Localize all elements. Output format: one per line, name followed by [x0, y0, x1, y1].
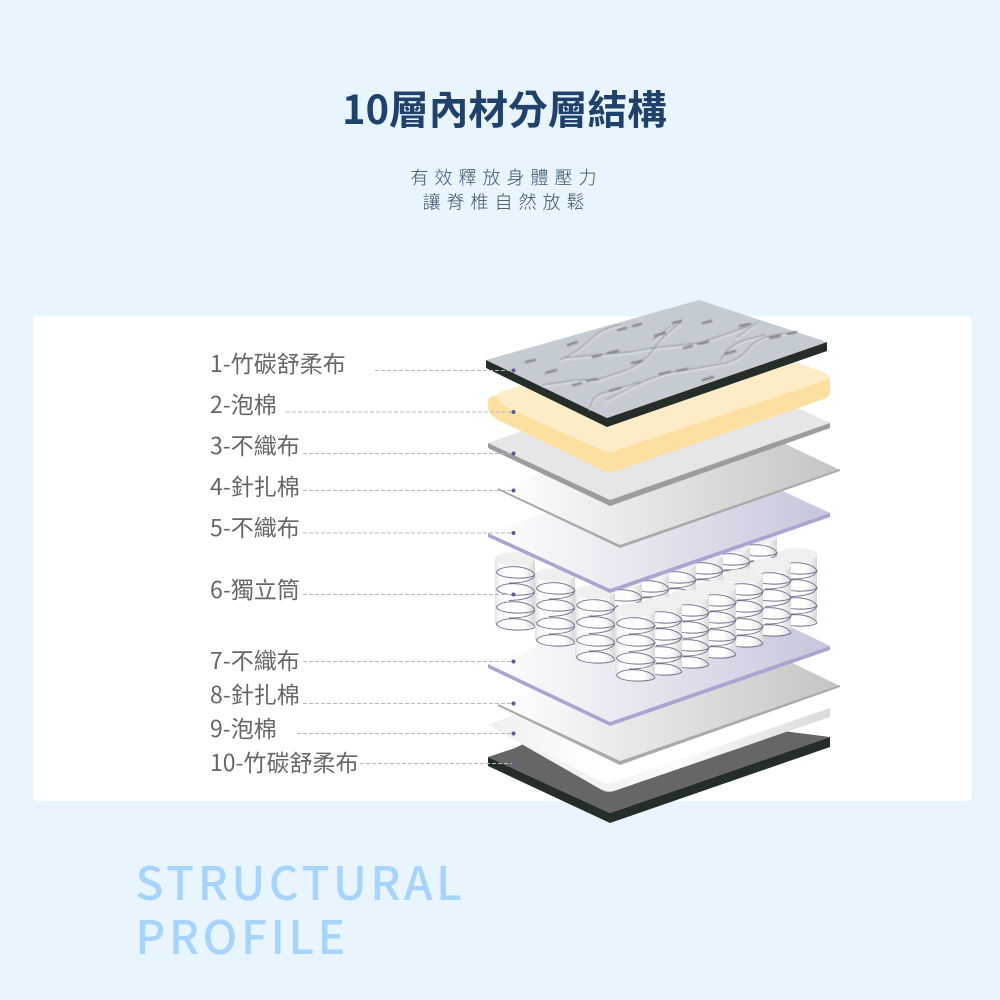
- label 1: [210, 345, 516, 379]
- label 7: [210, 642, 516, 676]
- label 7: 7-不織布: [210, 642, 300, 676]
- layer 4: needle-punched cotton: [498, 412, 840, 548]
- label 10: 10-竹碳舒柔布: [210, 744, 359, 778]
- label 5: 5-不織布: [210, 509, 300, 543]
- label 9: [210, 710, 516, 744]
- label 3: 3-不織布: [210, 427, 300, 461]
- label 3: [210, 427, 516, 461]
- label 8: 8-針扎棉: [210, 676, 300, 710]
- label 4: [210, 468, 516, 502]
- layer 1: bamboo charcoal quilted fabric: [486, 300, 827, 427]
- label 10: [210, 744, 516, 778]
- label 2: [210, 386, 516, 420]
- panel: white card: [33, 316, 972, 801]
- label 6: [210, 571, 516, 605]
- layer 10: bamboo charcoal fabric: [488, 708, 830, 823]
- label 9: 9-泡棉: [210, 710, 277, 744]
- label 1: 1-竹碳舒柔布: [210, 345, 346, 379]
- layer 6: pocket springs: [495, 530, 817, 681]
- english caption: PROFILE: [136, 902, 349, 968]
- title: 10層內材分層結構: [342, 79, 667, 136]
- layer 5: non-woven fabric: [488, 456, 830, 593]
- layer 3: non-woven fabric: [488, 366, 830, 506]
- layer labels and leader lines: [210, 345, 516, 778]
- layer 2: foam: [488, 330, 830, 472]
- label 6: 6-獨立筒: [210, 571, 300, 605]
- label 4: 4-針扎棉: [210, 468, 300, 502]
- english caption: [136, 848, 465, 968]
- layer 9: foam: [488, 680, 830, 792]
- english caption: STRUCTURAL: [136, 848, 465, 914]
- label 8: [210, 676, 516, 710]
- subtitle: [410, 164, 602, 214]
- subtitle: 讓脊椎自然放鬆: [422, 188, 590, 214]
- label 5: [210, 509, 516, 543]
- subtitle: 有效釋放身體壓力: [410, 164, 602, 190]
- layer 7: non-woven fabric: [488, 587, 830, 726]
- layer 8: needle-punched cotton: [498, 627, 840, 765]
- label 2: 2-泡棉: [210, 386, 277, 420]
